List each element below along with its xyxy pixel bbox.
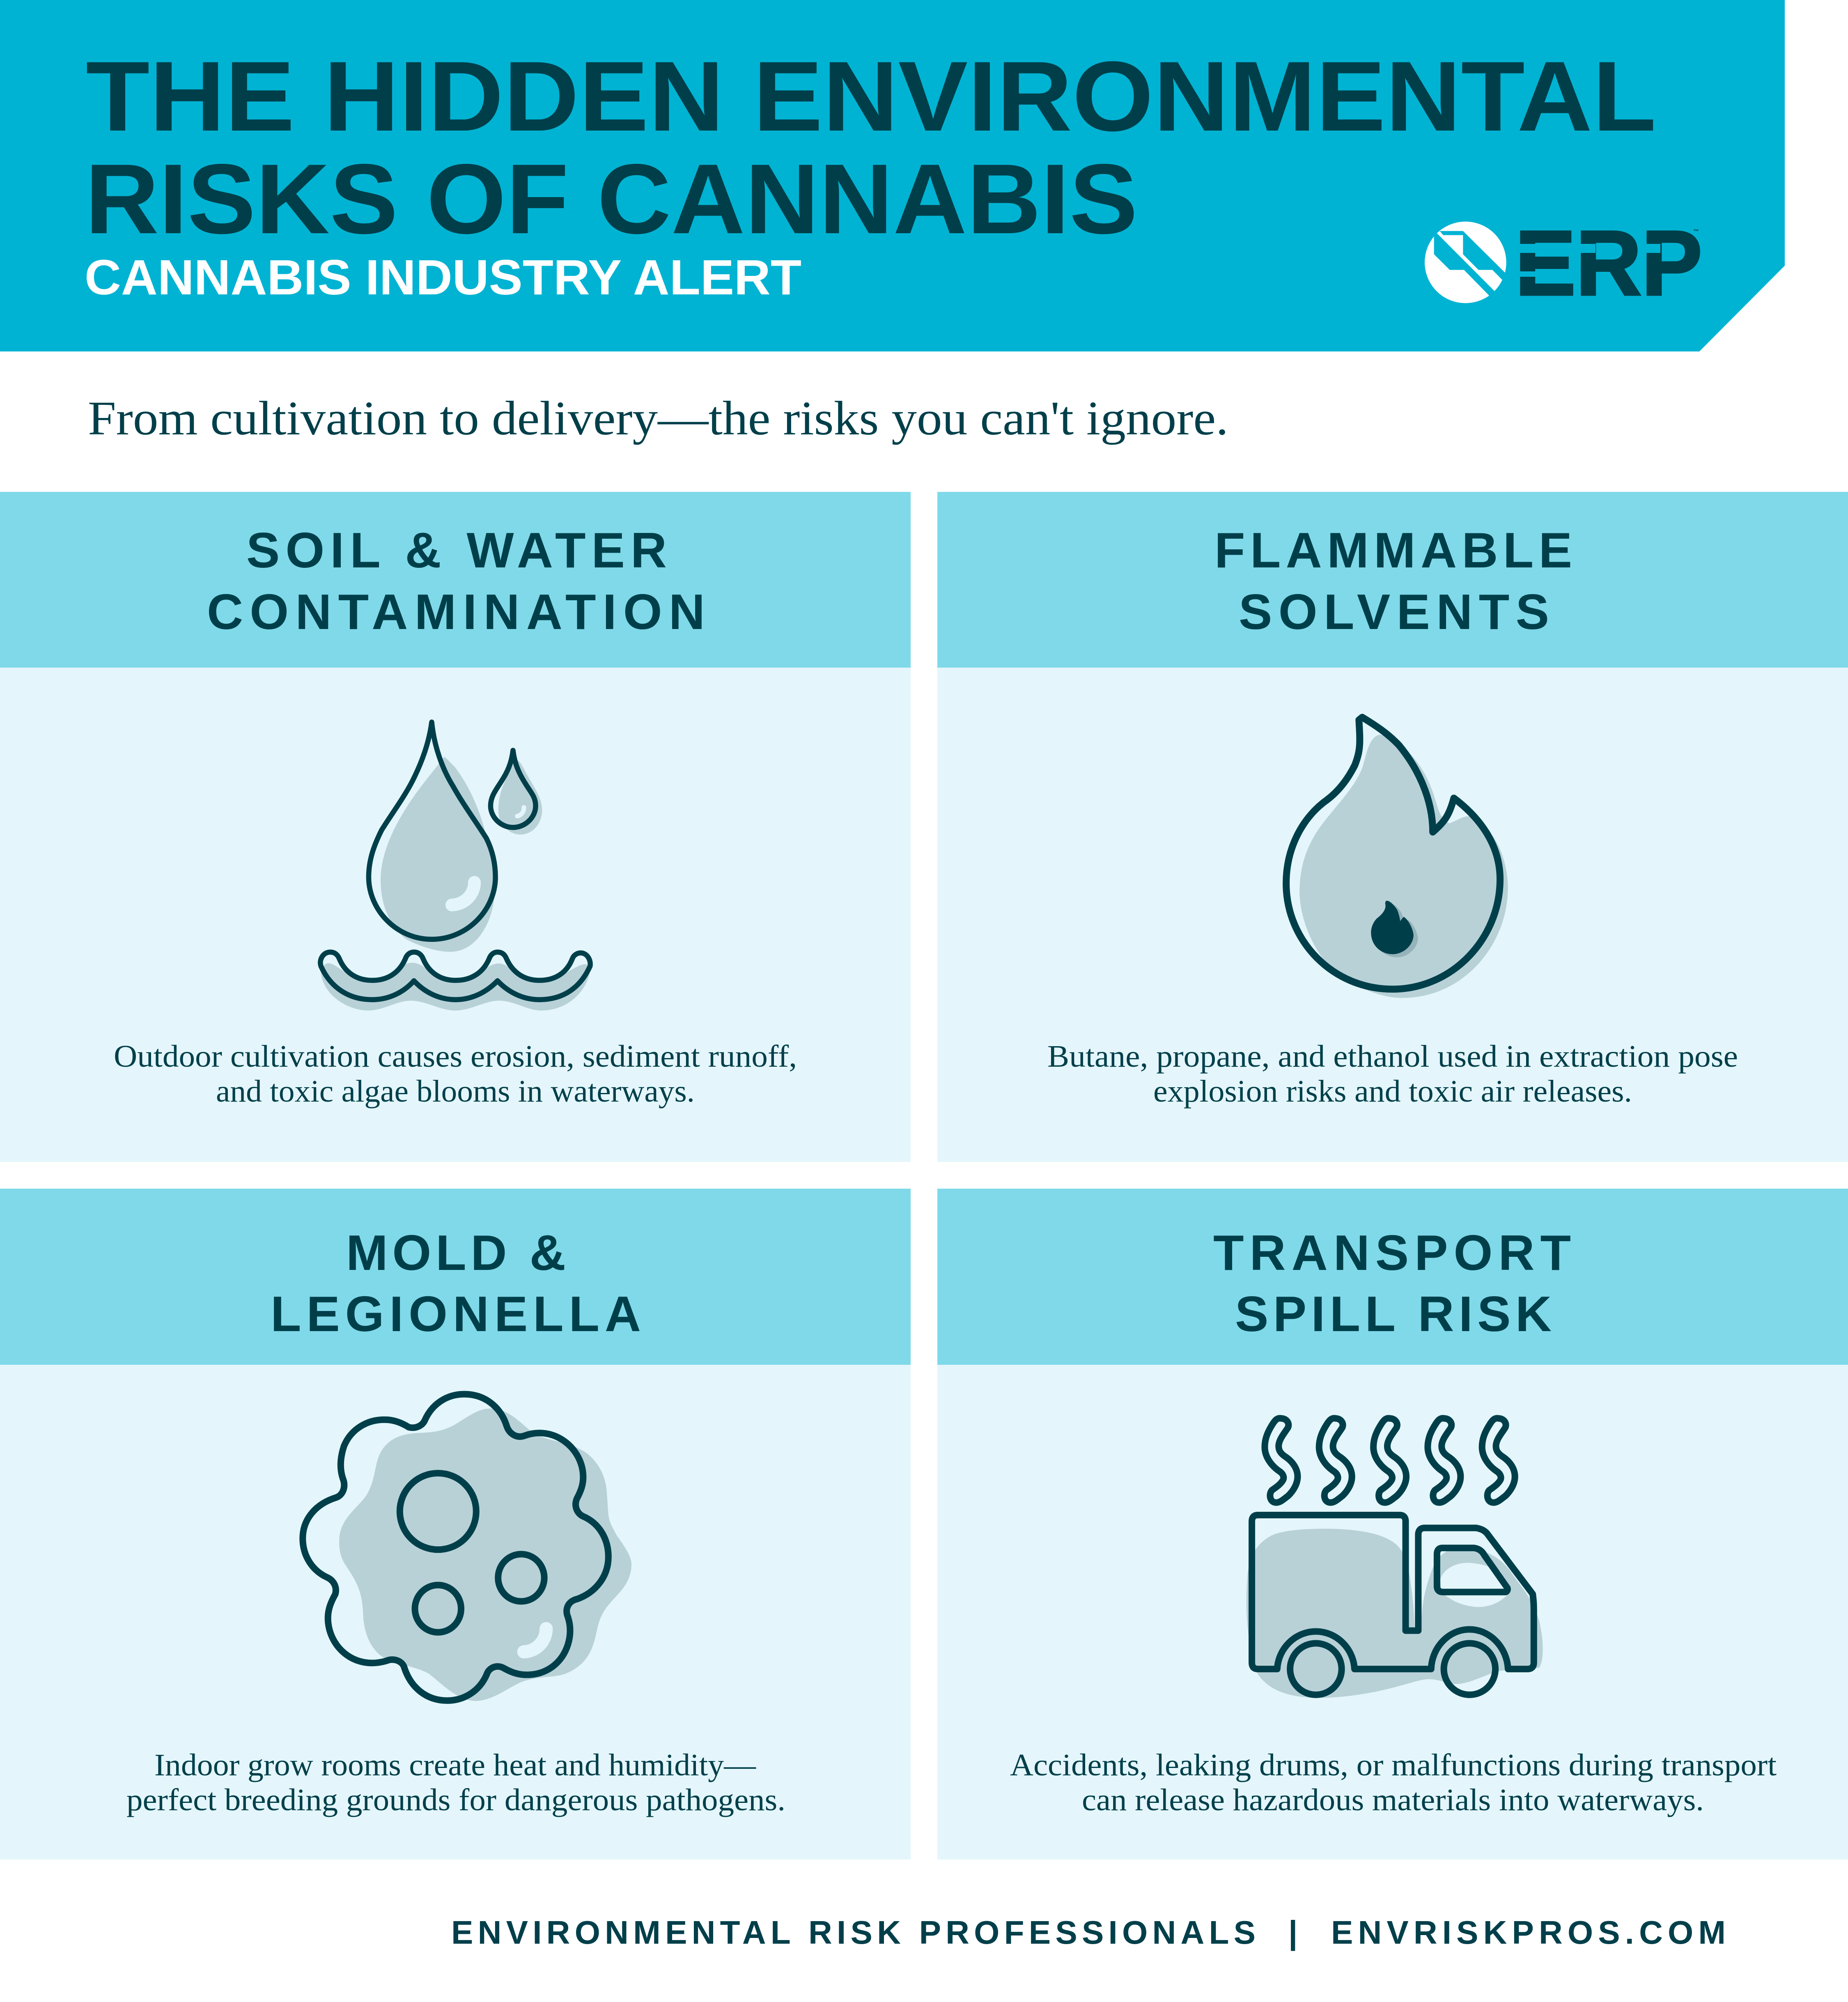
body text: transport spill risk: Accidents, leaking drums, or malfunctions during transport <box>1010 1748 1777 1782</box>
subtitle: CANNABIS INDUSTRY ALERT <box>85 249 801 305</box>
panel: soil and water contamination <box>0 492 911 1162</box>
icon: logo emblem <box>1425 222 1515 305</box>
heading: flammable solvents <box>1214 522 1572 640</box>
logo: ERP <box>1425 212 1702 315</box>
heading: flammable solvents: SOLVENTS <box>1239 584 1549 640</box>
heading: mold and legionella: LEGIONELLA <box>271 1286 641 1342</box>
heading: transport spill risk: SPILL RISK <box>1235 1286 1552 1342</box>
heading: soil and water: SOIL & WATER <box>246 522 667 578</box>
heading: flammable solvents: FLAMMABLE <box>1214 522 1572 578</box>
heading: transport spill risk: TRANSPORT <box>1213 1225 1571 1281</box>
body text: soil and water: Outdoor cultivation causes erosion, sediment runoff, <box>114 1039 797 1074</box>
icon: truck with fumes <box>1247 1418 1543 1698</box>
footer: | <box>1288 1914 1297 1951</box>
header banner <box>0 0 1785 351</box>
panel: mold and legionella <box>0 1189 911 1860</box>
icon: flame <box>1286 717 1508 998</box>
title <box>85 41 1656 255</box>
title: THE HIDDEN ENVIRONMENTAL <box>86 41 1656 152</box>
tagline: From cultivation to delivery—the risks you can't ignore. <box>88 391 1228 445</box>
icon: water drops and waves <box>320 722 590 1010</box>
footer: ENVRISKPROS.COM <box>1331 1914 1726 1951</box>
trademark: ™ <box>1693 228 1699 234</box>
body text: soil and water: and toxic algae blooms in waterways. <box>216 1074 695 1109</box>
body text: mold and legionella: Indoor grow rooms create heat and humidity— <box>154 1748 756 1782</box>
heading: mold and legionella <box>271 1225 641 1342</box>
body text: mold and legionella: perfect breeding grounds for dangerous pathogens. <box>126 1783 785 1817</box>
body text: flammable solvents <box>1047 1039 1738 1109</box>
logo wordmark: ERP <box>1515 212 1702 315</box>
body text: flammable solvents: explosion risks and toxic air releases. <box>1153 1074 1632 1109</box>
body text: mold and legionella <box>126 1748 785 1817</box>
panel: transport spill risk <box>937 1189 1848 1860</box>
panel: flammable solvents <box>937 492 1848 1162</box>
title: RISKS OF CANNABIS <box>85 144 1138 255</box>
footer <box>451 1914 1726 1951</box>
footer: ENVIRONMENTAL RISK PROFESSIONALS <box>451 1914 1256 1951</box>
heading: mold and legionella: MOLD & <box>346 1225 566 1281</box>
heading: soil and water: CONTAMINATION <box>207 584 705 640</box>
body text: flammable solvents: Butane, propane, and ethanol used in extraction pose <box>1047 1039 1738 1074</box>
icon: mold spore <box>303 1394 631 1701</box>
body text: transport spill risk: can release hazardous materials into waterways. <box>1082 1783 1704 1817</box>
heading: soil and water <box>207 522 705 640</box>
heading: transport spill risk <box>1213 1225 1571 1342</box>
body text: soil and water <box>114 1039 797 1109</box>
body text: transport spill risk <box>1010 1748 1777 1817</box>
